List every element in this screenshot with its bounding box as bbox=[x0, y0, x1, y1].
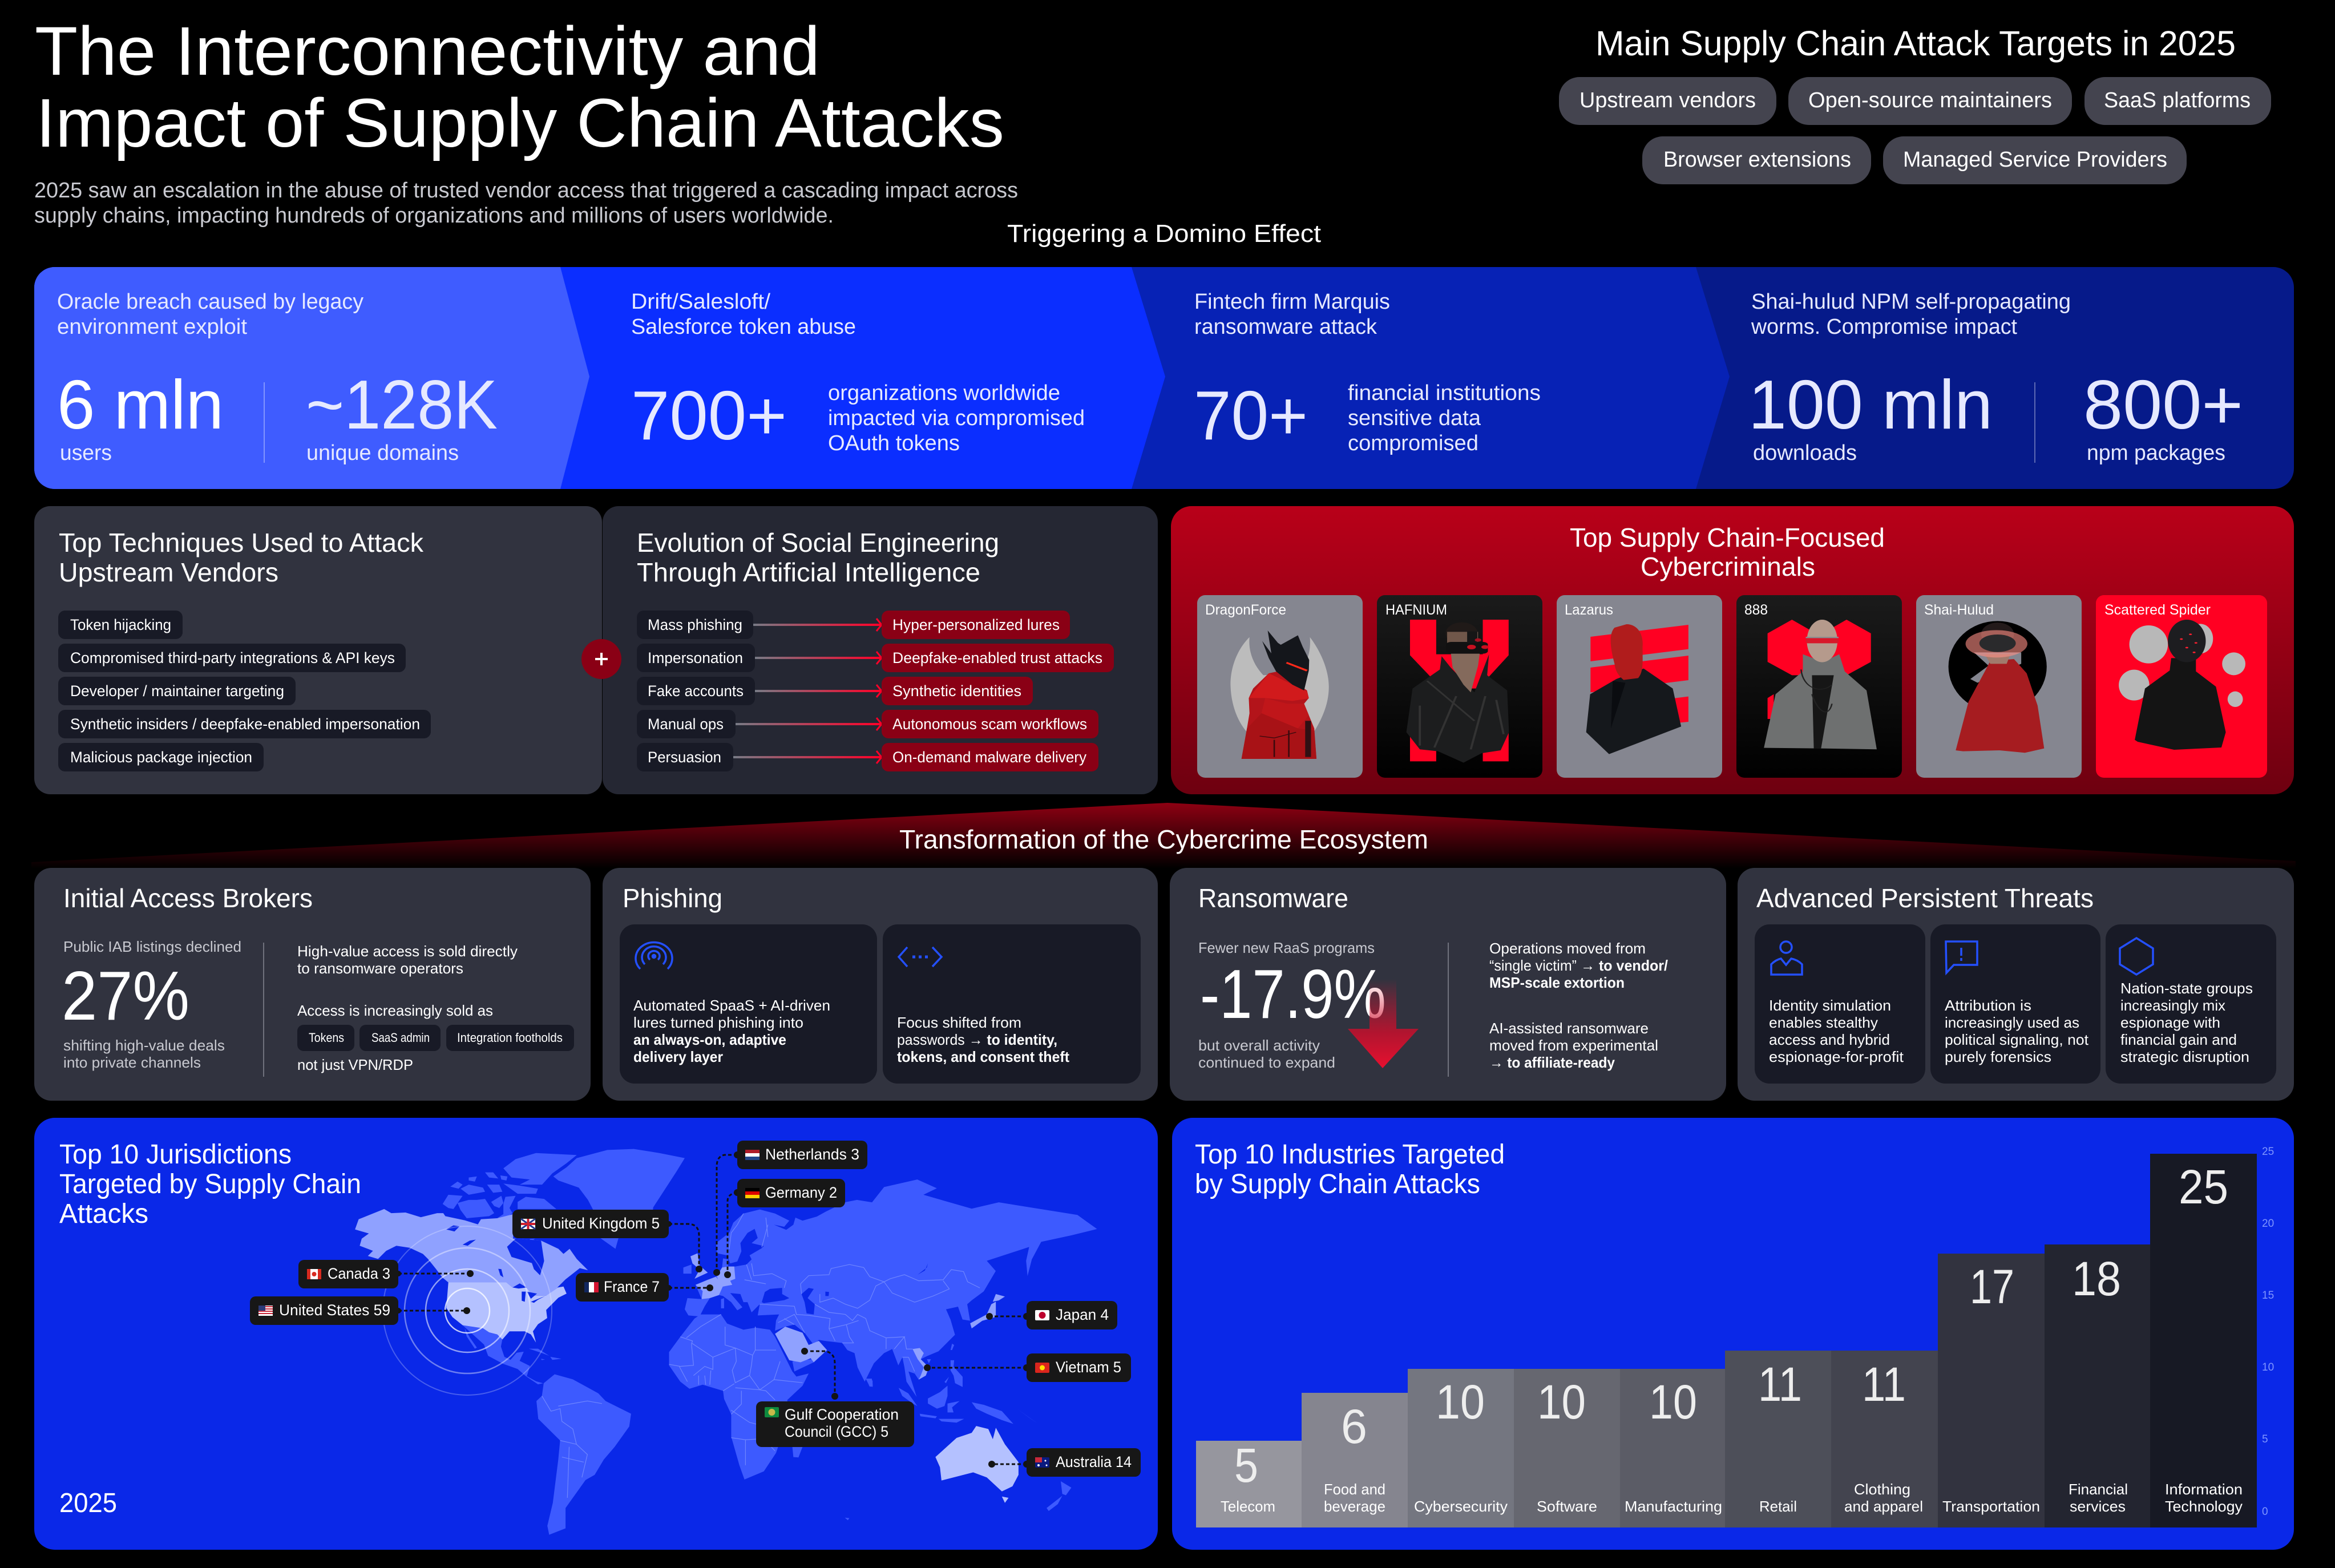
connector dots bbox=[395, 1151, 1030, 1468]
panel: domino strip: sensitive data bbox=[1348, 406, 1481, 430]
chart axis: 25 bbox=[2262, 1146, 2274, 1158]
banner: transformation wedge bbox=[31, 803, 2296, 870]
panel: top techniques: Upstream Vendors bbox=[59, 557, 278, 587]
heading: domino effect: Triggering a Domino Effect bbox=[1007, 220, 1321, 248]
panel: initial access brokers: 27% bbox=[62, 957, 189, 1034]
bar chart: Manufacturing bbox=[1625, 1498, 1722, 1515]
chart axis: 15 bbox=[2262, 1290, 2274, 1302]
panel: domino strip: financial institutions bbox=[1348, 381, 1541, 405]
panel: phishing: passwords → to identity, bbox=[897, 1031, 1057, 1048]
subtitle: 2025 saw an escalation in the abuse of trusted vendor access that triggered a cascading impact across bbox=[34, 179, 1018, 203]
panel: phishing bbox=[603, 868, 1158, 1101]
chart axis: 10 bbox=[2262, 1361, 2274, 1373]
panel: ransomware: Ransomware bbox=[1198, 883, 1348, 913]
panel: evolution of social engineering: Deepfake-enabled trust attacks bbox=[892, 649, 1102, 666]
panel: top cybercriminals: Cybercriminals bbox=[1641, 552, 1815, 581]
panel: ransomware: continued to expand bbox=[1198, 1054, 1335, 1071]
bar chart: Clothing bbox=[1854, 1481, 1910, 1498]
card: Lazarus bbox=[1557, 595, 1722, 778]
panel: domino strip: Salesforce token abuse bbox=[631, 315, 856, 339]
panel: advanced persistent threats: political signaling, not bbox=[1945, 1031, 2089, 1048]
label: Netherlands bbox=[737, 1141, 867, 1169]
panel: initial access brokers: High-value access is sold directly bbox=[297, 943, 518, 960]
panel: evolution of social engineering: Through Artificial Intelligence bbox=[637, 557, 980, 587]
chart axis: 20 bbox=[2262, 1218, 2274, 1230]
panel: domino strip: organizations worldwide bbox=[828, 381, 1060, 405]
title: Impact of Supply Chain Attacks bbox=[36, 84, 1004, 161]
label: United States bbox=[250, 1296, 398, 1325]
panel: ransomware: Operations moved from bbox=[1489, 940, 1646, 957]
chart axis bbox=[2262, 1146, 2274, 1518]
panel: ransomware bbox=[1170, 868, 1726, 1101]
panel: evolution of social engineering bbox=[603, 506, 1158, 794]
panel: industries chart: Top 10 Industries Targeted bbox=[1195, 1139, 1505, 1170]
label: Gulf Cooperation Council: Council (GCC) 5 bbox=[785, 1423, 888, 1440]
panel: evolution of social engineering: Synthetic identities bbox=[892, 682, 1021, 700]
heading: transformation: Transformation of the Cybercrime Ecosystem bbox=[899, 825, 1428, 854]
target pills: Managed Service Providers bbox=[1903, 148, 2167, 172]
card: HAFNIUM: HAFNIUM bbox=[1385, 602, 1447, 618]
chart axis: 0 bbox=[2262, 1506, 2268, 1518]
icon: speech alert bbox=[1946, 941, 1977, 973]
label: France bbox=[576, 1273, 669, 1302]
panel: domino strip: 6 mln bbox=[57, 366, 224, 443]
bar chart: 18 bbox=[2072, 1252, 2121, 1306]
bar chart: services bbox=[2070, 1498, 2126, 1515]
target pills bbox=[1559, 77, 2271, 184]
panel: initial access brokers: Access is increasingly sold as bbox=[297, 1002, 493, 1019]
panel: domino strip: Oracle breach caused by legacy bbox=[57, 290, 363, 314]
panel: evolution of social engineering: Manual ops bbox=[648, 716, 724, 733]
card: Shai-Hulud bbox=[1916, 595, 2082, 778]
title bbox=[35, 12, 1004, 161]
north america and arctic bbox=[355, 1149, 685, 1384]
panel: industries chart bbox=[1172, 1118, 2294, 1550]
panel: domino strip: OAuth tokens bbox=[828, 431, 960, 455]
panel: jurisdictions map: Targeted by Supply Chain bbox=[59, 1169, 361, 1199]
panel: initial access brokers: Public IAB listings declined bbox=[63, 938, 241, 955]
bar chart: Software bbox=[1537, 1498, 1597, 1515]
panel: advanced persistent threats: Advanced Persistent Threats bbox=[1756, 883, 2094, 913]
panel: phishing: tokens, and consent theft bbox=[897, 1048, 1069, 1065]
panel: ransomware: AI-assisted ransomware bbox=[1489, 1020, 1649, 1037]
Japan bbox=[970, 1294, 1005, 1328]
bar chart: 25 bbox=[2179, 1160, 2228, 1214]
target pills: SaaS platforms bbox=[2104, 88, 2251, 112]
panel: top techniques: Compromised third-party integrations & API keys bbox=[70, 649, 395, 666]
label: Canada: Canada 3 bbox=[328, 1265, 390, 1282]
world map bbox=[355, 1149, 1097, 1535]
panel: jurisdictions map: 2025 bbox=[59, 1488, 117, 1518]
card: Scattered Spider: Scattered Spider bbox=[2104, 602, 2211, 618]
panel: evolution of social engineering: Evolution of Social Engineering bbox=[637, 528, 999, 557]
target pills: Browser extensions bbox=[1663, 148, 1851, 172]
panel: jurisdictions map: Top 10 Jurisdictions bbox=[59, 1139, 292, 1170]
bar chart bbox=[1196, 1154, 2257, 1527]
bar chart: Food and bbox=[1324, 1481, 1385, 1498]
europe africa and asia bbox=[669, 1179, 1097, 1480]
panel: top cybercriminals: Top Supply Chain-Focused bbox=[1570, 523, 1885, 552]
card: Scattered Spider bbox=[2096, 595, 2267, 778]
panel: domino strip: worms. Compromise impact bbox=[1751, 315, 2017, 339]
icon: signal arches bbox=[636, 942, 672, 969]
panel: ransomware: but overall activity bbox=[1198, 1037, 1320, 1054]
south america bbox=[536, 1374, 631, 1535]
panel: domino strip: 800+ bbox=[2083, 366, 2243, 443]
bar chart: 5 bbox=[1234, 1438, 1258, 1492]
France bbox=[696, 1276, 723, 1299]
panel: ransomware: moved from experimental bbox=[1489, 1037, 1658, 1054]
bar chart: Telecom bbox=[1221, 1498, 1275, 1515]
label: Germany: Germany 2 bbox=[765, 1184, 837, 1201]
panel: jurisdictions map: Attacks bbox=[59, 1199, 148, 1229]
card: 888 bbox=[1736, 595, 1902, 778]
panel: advanced persistent threats: strategic disruption bbox=[2120, 1048, 2249, 1065]
panel: domino strip bbox=[34, 267, 2294, 489]
label: Australia: Australia 14 bbox=[1056, 1453, 1132, 1470]
panel: domino strip: 100 mln bbox=[1748, 366, 1993, 443]
bar chart: 10 bbox=[1436, 1375, 1485, 1429]
bar chart: 10 bbox=[1537, 1375, 1586, 1429]
panel: phishing: an always-on, adaptive bbox=[633, 1031, 786, 1048]
panel: phishing: Automated SpaaS + AI-driven bbox=[633, 997, 830, 1014]
panel: advanced persistent threats: espionage-for-profit bbox=[1769, 1048, 1904, 1065]
panel: domino strip: 700+ bbox=[631, 377, 787, 454]
label: Vietnam: Vietnam 5 bbox=[1056, 1359, 1121, 1376]
target pills: Upstream vendors bbox=[1579, 88, 1756, 112]
United Kingdom bbox=[690, 1253, 708, 1279]
panel: initial access brokers: Integration footholds bbox=[457, 1030, 563, 1045]
panel: evolution of social engineering: Impersonation bbox=[648, 649, 743, 666]
panel: domino strip: npm packages bbox=[2087, 441, 2225, 465]
Australia bbox=[935, 1426, 1019, 1503]
panel: evolution of social engineering: Hyper-personalized lures bbox=[892, 616, 1060, 633]
bar chart: and apparel bbox=[1844, 1498, 1923, 1515]
bar chart: 11 bbox=[1862, 1357, 1906, 1411]
heading: main targets: Main Supply Chain Attack Targets in 2025 bbox=[1595, 24, 2236, 63]
panel: initial access brokers: SaaS admin bbox=[371, 1030, 430, 1045]
panel: advanced persistent threats: Identity simulation bbox=[1769, 997, 1891, 1014]
panel: domino strip: compromised bbox=[1348, 431, 1478, 455]
bar chart: 10 bbox=[1649, 1375, 1697, 1429]
bar chart: Retail bbox=[1759, 1498, 1797, 1515]
panel: phishing: Phishing bbox=[623, 883, 722, 913]
radar rings bbox=[383, 1226, 552, 1395]
label: Japan: Japan 4 bbox=[1056, 1306, 1109, 1323]
panel: top cybercriminals bbox=[1171, 506, 2294, 794]
panel: top techniques bbox=[34, 506, 602, 794]
panel: ransomware: → to affiliate-ready bbox=[1489, 1054, 1615, 1071]
panel: domino strip: users bbox=[60, 441, 112, 465]
subtitle: supply chains, impacting hundreds of organizations and millions of users worldwide. bbox=[34, 204, 834, 228]
panel: initial access brokers: Tokens bbox=[309, 1030, 344, 1045]
card: HAFNIUM bbox=[1377, 595, 1542, 778]
panel: domino strip: impacted via compromised bbox=[828, 406, 1085, 430]
label: United Kingdom bbox=[512, 1210, 669, 1238]
United States bbox=[446, 1282, 567, 1343]
label: Gulf Cooperation Council bbox=[756, 1401, 914, 1447]
target pills: Open-source maintainers bbox=[1808, 88, 2052, 112]
label: Australia bbox=[1027, 1448, 1141, 1477]
label: Netherlands: Netherlands 3 bbox=[765, 1146, 859, 1163]
panel: domino strip: 70+ bbox=[1194, 377, 1308, 454]
panel: evolution of social engineering: Fake accounts bbox=[648, 682, 744, 700]
panel: phishing: lures turned phishing into bbox=[633, 1014, 803, 1031]
panel: top techniques: Synthetic insiders / deepfake-enabled impersonation bbox=[70, 716, 420, 733]
icon: code brackets bbox=[899, 947, 942, 967]
chart axis: 5 bbox=[2262, 1433, 2268, 1445]
panel: advanced persistent threats: access and hybrid bbox=[1769, 1031, 1890, 1048]
panel: ransomware: “single victim” → to vendor/ bbox=[1489, 957, 1668, 974]
panel: advanced persistent threats: financial gain and bbox=[2120, 1031, 2237, 1048]
panel: evolution of social engineering: On-demand malware delivery bbox=[892, 749, 1086, 766]
panel: evolution of social engineering: Persuasion bbox=[648, 749, 721, 766]
label: Germany bbox=[737, 1179, 845, 1207]
panel: evolution of social engineering: Autonomous scam workflows bbox=[892, 716, 1087, 733]
panel: phishing: delivery layer bbox=[633, 1048, 723, 1065]
panel: initial access brokers: not just VPN/RDP bbox=[297, 1056, 413, 1073]
bar chart: Financial bbox=[2069, 1481, 2128, 1498]
panel: initial access brokers: to ransomware operators bbox=[297, 960, 463, 977]
card: Shai-Hulud: Shai-Hulud bbox=[1924, 602, 1994, 618]
card: Lazarus: Lazarus bbox=[1565, 602, 1613, 618]
panel: advanced persistent threats: espionage with bbox=[2120, 1014, 2220, 1031]
label: United States: United States 59 bbox=[279, 1302, 390, 1319]
panel: domino strip: Drift/Salesloft/ bbox=[631, 290, 770, 314]
panel: top techniques: Developer / maintainer targeting bbox=[70, 682, 284, 700]
panel: advanced persistent threats: enables stealthy bbox=[1769, 1014, 1878, 1031]
panel: initial access brokers: shifting high-value deals bbox=[63, 1037, 225, 1054]
panel: jurisdictions map bbox=[34, 1118, 1158, 1550]
connectors bbox=[398, 1155, 1027, 1464]
label: Japan bbox=[1027, 1301, 1117, 1329]
panel: advanced persistent threats: increasingly mix bbox=[2120, 997, 2225, 1014]
panel: domino strip: downloads bbox=[1753, 441, 1857, 465]
panel: domino strip: environment exploit bbox=[57, 315, 247, 339]
Vietnam bbox=[912, 1348, 929, 1380]
bar chart: Cybersecurity bbox=[1414, 1498, 1508, 1515]
subtitle bbox=[34, 179, 1018, 228]
card: DragonForce: DragonForce bbox=[1205, 602, 1286, 618]
bar chart: beverage bbox=[1324, 1498, 1385, 1515]
hudson bay and lakes bbox=[446, 1225, 575, 1303]
bar chart: 11 bbox=[1758, 1357, 1802, 1411]
asia pacific islands bbox=[845, 1294, 1072, 1520]
panel: phishing: Focus shifted from bbox=[897, 1014, 1021, 1031]
panel: top techniques: Token hijacking bbox=[70, 616, 171, 633]
icon: person bbox=[1771, 941, 1802, 975]
panel: domino strip: Fintech firm Marquis bbox=[1194, 290, 1390, 314]
label: Gulf Cooperation Council: Gulf Cooperation bbox=[785, 1406, 899, 1423]
panel: domino strip: Shai-hulud NPM self-propagating bbox=[1751, 290, 2071, 314]
panel: ransomware: MSP-scale extortion bbox=[1489, 974, 1625, 991]
panel: top techniques: Top Techniques Used to Attack bbox=[59, 528, 424, 557]
label: United Kingdom: United Kingdom 5 bbox=[542, 1215, 660, 1232]
panel: advanced persistent threats bbox=[1738, 868, 2294, 1101]
panel: domino strip: unique domains bbox=[306, 441, 459, 465]
Germany and Netherlands bbox=[717, 1267, 736, 1287]
panel: top techniques: Malicious package injection bbox=[70, 749, 252, 766]
bar chart: Transportation bbox=[1942, 1498, 2040, 1515]
label: Vietnam bbox=[1027, 1353, 1131, 1382]
card: 888: 888 bbox=[1744, 602, 1768, 618]
panel: ransomware: -17.9% bbox=[1200, 955, 1386, 1033]
panel: ransomware: Fewer new RaaS programs bbox=[1198, 939, 1375, 956]
title: The Interconnectivity and bbox=[35, 12, 820, 90]
bar chart: 6 bbox=[1341, 1400, 1367, 1453]
panel: initial access brokers: Initial Access Brokers bbox=[63, 883, 313, 913]
icon: hexagon bbox=[2120, 938, 2153, 975]
panel: advanced persistent threats: purely forensics bbox=[1945, 1048, 2051, 1065]
panel: advanced persistent threats: increasingly used as bbox=[1945, 1014, 2079, 1031]
panel: advanced persistent threats: Attribution is bbox=[1945, 997, 2031, 1014]
icon: down arrow bbox=[1348, 979, 1419, 1068]
Gulf states bbox=[775, 1327, 827, 1362]
panel: industries chart: by Supply Chain Attacks bbox=[1195, 1169, 1480, 1199]
bar chart: 17 bbox=[1970, 1260, 2014, 1314]
card: DragonForce bbox=[1197, 595, 1363, 778]
bar chart: Technology bbox=[2165, 1498, 2243, 1515]
Canada bbox=[355, 1209, 588, 1296]
panel: initial access brokers bbox=[34, 868, 591, 1101]
panel: evolution of social engineering: Mass phishing bbox=[648, 616, 742, 633]
icon: plus badge bbox=[581, 639, 621, 679]
label: France: France 7 bbox=[604, 1278, 660, 1295]
panel: domino strip: ransomware attack bbox=[1194, 315, 1377, 339]
label: Canada bbox=[298, 1260, 398, 1288]
panel: initial access brokers: into private channels bbox=[63, 1054, 201, 1071]
bar chart: Information bbox=[2165, 1481, 2243, 1498]
panel: advanced persistent threats: Nation-state groups bbox=[2120, 980, 2253, 997]
panel: domino strip: ~128K bbox=[306, 366, 498, 443]
